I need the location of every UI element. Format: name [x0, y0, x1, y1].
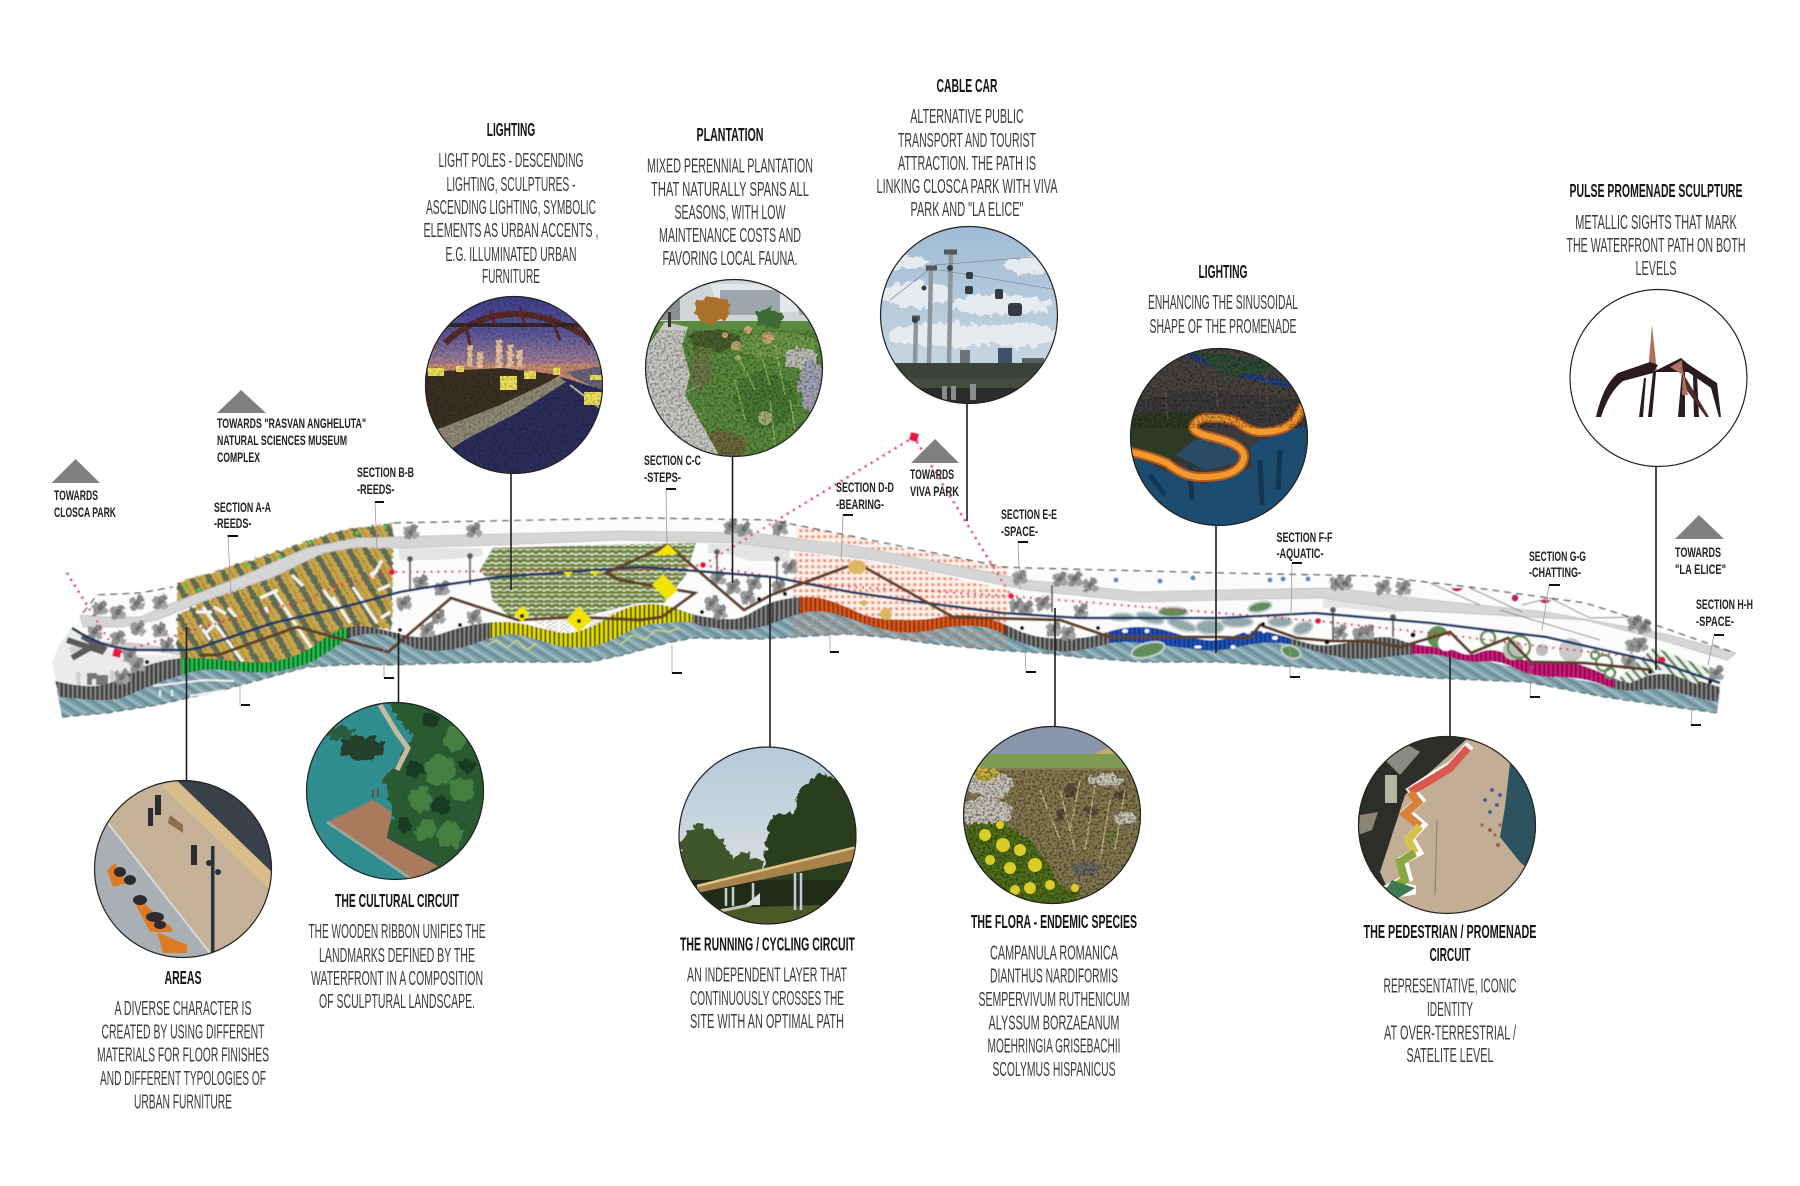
text block: areas: A DIVERSE CHARACTER IS	[114, 997, 252, 1020]
section label A-A	[214, 499, 271, 705]
text block: lighting: E.G. ILLUMINATED URBAN	[446, 243, 576, 266]
text block: cultural circuit: THE CULTURAL CIRCUIT	[335, 890, 459, 911]
connector line: cable car	[966, 404, 968, 521]
text block: cultural circuit	[308, 890, 486, 1013]
text block: lighting	[424, 119, 598, 288]
left plaza	[52, 628, 180, 705]
green accents in reeds	[184, 525, 387, 592]
text block: lighting: LIGHTING	[487, 119, 535, 140]
red markers	[112, 432, 1665, 664]
photo circle: lighting	[425, 296, 604, 478]
text block: cable car: ALTERNATIVE PUBLIC	[910, 105, 1024, 128]
connector line: lighting	[510, 474, 512, 590]
direction marker: Closca Park: TOWARDS	[54, 487, 98, 503]
text block: flora: THE FLORA - ENDEMIC SPECIES	[971, 911, 1137, 932]
section label G-G: SECTION G-G	[1529, 548, 1586, 564]
section label E-E: -SPACE-	[1001, 523, 1038, 539]
text block: plantation: MAINTENANCE COSTS AND	[659, 224, 801, 247]
text block: pedestrian promenade circuit: AT OVER-TERRESTRIAL /	[1384, 1021, 1516, 1044]
small lattice near the yellow band	[530, 610, 620, 637]
text block: running and cycling circuit: SITE WITH AN OPTIMAL PATH	[690, 1010, 844, 1033]
text block: flora: CAMPANULA ROMANICA	[990, 941, 1118, 964]
section label G-G	[1529, 548, 1586, 697]
section label H-H	[1691, 596, 1753, 725]
reed area below the road	[177, 547, 393, 664]
text block: flora: DIANTHUS NARDIFORMIS	[990, 965, 1118, 988]
section label A-A: -REEDS-	[214, 515, 252, 531]
text block: lighting two: SHAPE OF THE PROMENADE	[1150, 315, 1296, 338]
text block: areas	[97, 967, 269, 1113]
water lower dashed edge	[62, 634, 1717, 717]
text block: areas: AREAS	[164, 967, 202, 988]
connector line: running circuit	[769, 577, 771, 747]
text block: flora: SEMPERVIVUM RUTHENICUM	[978, 988, 1130, 1011]
strip base ground	[52, 518, 1735, 690]
section label B-B	[357, 464, 414, 678]
section label C-C: SECTION C-C	[644, 452, 701, 468]
text block: lighting two: ENHANCING THE SINUSOIDAL	[1148, 291, 1298, 314]
text block: running and cycling circuit: CONTINUOUSLY CROSSES THE	[690, 987, 844, 1010]
text block: flora	[971, 911, 1137, 1081]
section label H-H: -SPACE-	[1696, 613, 1734, 629]
small black nodes	[145, 566, 1712, 684]
text block: plantation: PLANTATION	[696, 124, 764, 145]
text block: pedestrian promenade circuit: CIRCUIT	[1430, 944, 1471, 965]
section label G-G: -CHATTING-	[1529, 564, 1581, 580]
brown wooden ribbon	[200, 545, 1652, 670]
text block: cultural circuit: OF SCULPTURAL LANDSCAPE.	[319, 990, 475, 1013]
orange section	[799, 596, 1006, 636]
text block: plantation: MIXED PERENNIAL PLANTATION	[647, 155, 813, 178]
section label B-B: -REEDS-	[357, 481, 395, 497]
navy cycling path	[72, 567, 1720, 683]
white reed footpaths	[196, 560, 390, 672]
text block: areas: AND DIFFERENT TYPOLOGIES OF	[100, 1067, 266, 1090]
photo circle: running and cycling circuit	[672, 746, 865, 930]
stipple on water, yellow scribbles and small jetty	[153, 611, 1006, 697]
section label F-F: SECTION F-F	[1276, 529, 1333, 545]
text block: flora: SCOLYMUS HISPANICUS	[992, 1058, 1116, 1081]
connector line: plantation	[732, 457, 734, 583]
text block: pedestrian promenade circuit: SATELITE LEVEL	[1406, 1044, 1494, 1067]
direction marker: natural sciences museum	[217, 390, 366, 465]
direction marker: La Elice: TOWARDS	[1675, 544, 1721, 560]
site plan strip	[52, 432, 1736, 717]
trees	[87, 519, 1724, 685]
striped promenade band: grey base	[55, 597, 1720, 702]
direction marker: natural sciences museum: NATURAL SCIENCES MUSEUM	[217, 432, 347, 448]
text block: pedestrian promenade circuit	[1364, 921, 1536, 1067]
text: THE WOODEN RIBBON UNIFIES THE	[308, 920, 486, 943]
text block: running and cycling circuit	[680, 934, 855, 1033]
blue section	[1109, 626, 1291, 652]
direction marker: Viva Park: VIVA PARK	[910, 483, 959, 499]
text block: pulse promenade sculpture: LEVELS	[1636, 257, 1676, 280]
reed area above the road	[177, 523, 393, 605]
text block: cultural circuit: WATERFRONT IN A COMPOSITION	[311, 967, 483, 990]
connector line: pulse sculpture	[1655, 467, 1657, 670]
text block: cable car: TRANSPORT AND TOURIST	[898, 129, 1036, 152]
connector line: flora	[1054, 608, 1056, 726]
section label F-F	[1276, 529, 1333, 677]
green section	[180, 626, 349, 676]
section label D-D	[830, 479, 894, 652]
text block: running and cycling circuit: THE RUNNING / CYCLING CIRCUIT	[680, 934, 855, 955]
photo circle: sinusoidal lighting	[1125, 348, 1310, 530]
text block: lighting two	[1148, 261, 1298, 338]
section label A-A: SECTION A-A	[214, 499, 271, 515]
text block: pedestrian promenade circuit: REPRESENTATIVE, ICONIC	[1384, 975, 1517, 998]
section label C-C	[644, 452, 701, 673]
text block: cable car: CABLE CAR	[936, 75, 998, 96]
text block: cable car	[876, 75, 1058, 221]
text block: plantation: FAVORING LOCAL FAUNA.	[662, 247, 798, 270]
text block: cable car: PARK AND "LA ELICE"	[910, 198, 1024, 221]
road	[80, 531, 1736, 660]
text block: lighting: ASCENDING LIGHTING, SYMBOLIC	[426, 196, 596, 219]
text block: pulse promenade sculpture	[1566, 180, 1746, 280]
aquatic islands	[1110, 576, 1314, 661]
upper dashed boundary	[83, 518, 1735, 653]
section label H-H: SECTION H-H	[1696, 596, 1753, 612]
direction marker: Viva Park	[910, 439, 959, 499]
direction marker: natural sciences museum: COMPLEX	[217, 449, 260, 465]
text block: cultural circuit: LANDMARKS DEFINED BY THE	[319, 944, 475, 967]
text block: areas: MATERIALS FOR FLOOR FINISHES	[97, 1044, 269, 1067]
direction marker: Closca Park	[52, 459, 116, 520]
connector line: lighting two	[1215, 526, 1217, 653]
section label D-D: -BEARING-	[836, 496, 884, 512]
red dotted route	[67, 437, 1662, 660]
photo circle: cable car	[879, 226, 1058, 405]
text block: flora: MOEHRINGIA GRISEBACHII	[988, 1035, 1120, 1058]
section label E-E	[1001, 506, 1057, 672]
connector line: areas	[186, 627, 188, 780]
text block: plantation: SEASONS, WITH LOW	[674, 201, 786, 224]
photo circle: plantation	[645, 279, 825, 459]
text block: pedestrian promenade circuit: THE PEDESTRIAN / PROMENADE	[1364, 921, 1536, 942]
connector line: pedestrian circuit	[1449, 657, 1451, 736]
planted lattice area	[480, 543, 696, 618]
text block: lighting: LIGHTING, SCULPTURES -	[446, 173, 576, 196]
water band	[57, 603, 1720, 717]
connector line: cultural circuit	[398, 633, 400, 702]
section label F-F: -AQUATIC-	[1276, 545, 1324, 561]
direction marker: Closca Park: CLOSCA PARK	[54, 504, 116, 520]
text block: areas: CREATED BY USING DIFFERENT	[102, 1020, 265, 1043]
stippled area above the road	[796, 525, 1008, 582]
text block: flora: ALYSSUM BORZAEANUM	[988, 1011, 1120, 1034]
light paved strips	[398, 544, 1404, 612]
end of strip hatched area	[1617, 647, 1712, 684]
yellow markers	[514, 544, 678, 632]
direction marker: Viva Park: TOWARDS	[910, 466, 954, 482]
circular planting and seating near the east end	[1427, 583, 1640, 678]
text block: lighting: ELEMENTS AS URBAN ACCENTS ,	[424, 219, 598, 242]
tan accents on the stipple	[848, 560, 892, 620]
text block: plantation: THAT NATURALLY SPANS ALL	[651, 178, 809, 201]
section label E-E: SECTION E-E	[1001, 506, 1057, 522]
photo circle: pulse sculpture	[1570, 290, 1747, 466]
text block: running and cycling circuit: AN INDEPENDENT LAYER THAT	[687, 964, 847, 987]
light poles	[408, 550, 1395, 640]
text block: pedestrian promenade circuit: IDENTITY	[1427, 998, 1473, 1021]
yellow section	[489, 604, 693, 648]
stippled area below the road	[793, 552, 1008, 625]
magenta section	[1411, 644, 1615, 689]
direction marker: La Elice: "LA ELICE"	[1675, 561, 1726, 577]
section label B-B: SECTION B-B	[357, 464, 414, 480]
section label C-C: -STEPS-	[644, 469, 681, 485]
photo circle: pedestrian promenade	[1350, 736, 1540, 916]
text block: areas: URBAN FURNITURE	[134, 1090, 232, 1113]
photo circle: areas	[90, 776, 280, 960]
text block: plantation	[647, 124, 813, 270]
text block: lighting: FURNITURE	[482, 265, 540, 288]
section label D-D: SECTION D-D	[836, 479, 894, 495]
text block: lighting: LIGHT POLES - DESCENDING	[438, 149, 584, 172]
direction marker: La Elice	[1675, 515, 1726, 577]
photo circle: cultural circuit	[306, 695, 490, 885]
text block: cable car: ATTRACTION. THE PATH IS	[898, 152, 1036, 175]
photo circle: flora	[957, 726, 1141, 910]
direction marker: natural sciences museum: TOWARDS "RASVAN ANGHELUTA"	[217, 415, 366, 431]
text block: cable car: LINKING CLOSCA PARK WITH VIVA	[876, 175, 1058, 198]
text block: lighting two: LIGHTING	[1198, 261, 1248, 282]
